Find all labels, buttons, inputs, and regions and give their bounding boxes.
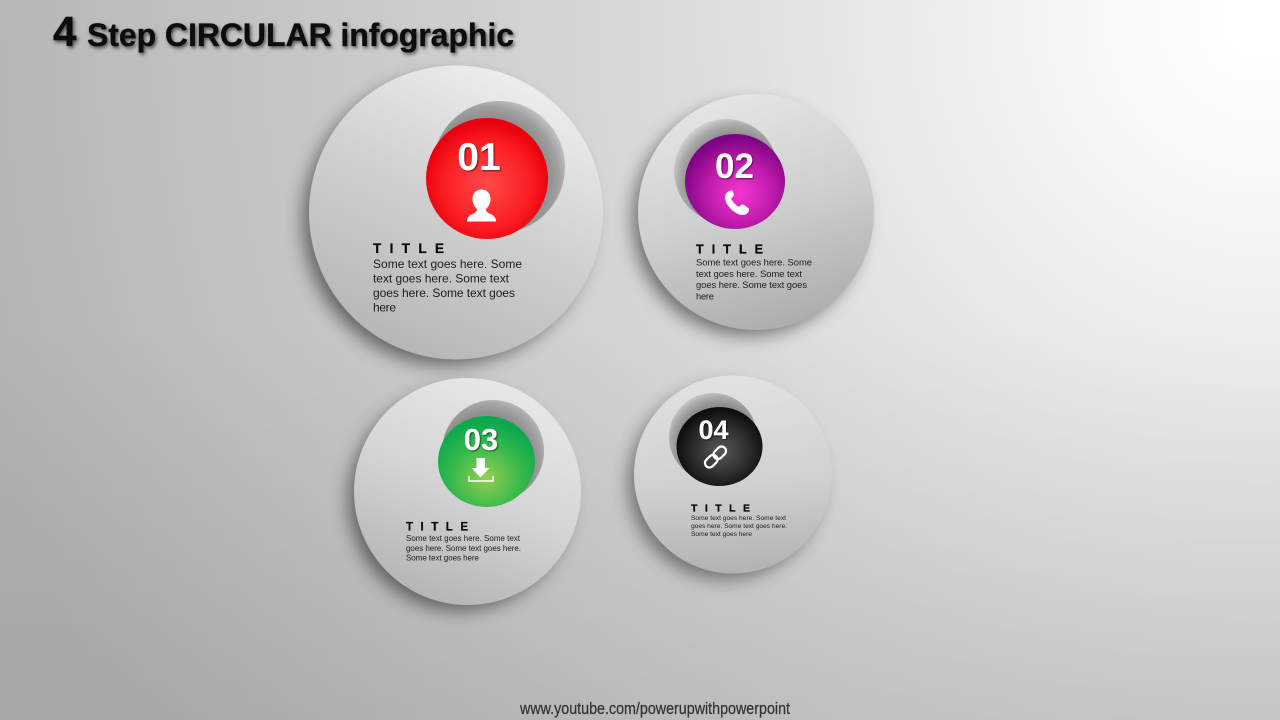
step 01 text: Some text goes here. Some bbox=[373, 257, 522, 271]
step 04 text bbox=[691, 515, 787, 538]
step 03 heading: TITLE bbox=[406, 522, 468, 534]
step 03 text: goes here. Some text goes here. bbox=[406, 544, 521, 553]
step 01 text bbox=[373, 257, 522, 314]
panel: step 03 bbox=[349, 378, 581, 610]
step 01 heading: TITLE bbox=[373, 241, 444, 256]
step 04 badge bbox=[676, 407, 762, 486]
step 02 badge bbox=[685, 134, 785, 229]
title: 4 bbox=[53, 8, 77, 55]
step 01 text: goes here. Some text goes bbox=[373, 286, 515, 300]
step 02 text: Some text goes here. Some bbox=[696, 257, 812, 268]
step 04 text: Some text goes here. Some text bbox=[691, 515, 786, 522]
step 01 text: here bbox=[373, 300, 396, 314]
panel: step 01 bbox=[303, 66, 603, 365]
step 04 text: goes here. Some text goes here. bbox=[691, 523, 787, 530]
step 02 heading: TITLE bbox=[696, 242, 763, 256]
step 02 number: 02 bbox=[715, 147, 754, 186]
footer url: www.youtube.com/powerupwithpowerpoint bbox=[519, 699, 790, 718]
step 03 text: Some text goes here bbox=[406, 554, 480, 563]
step 01 text: text goes here. Some text bbox=[373, 272, 510, 286]
panel: step 04 bbox=[629, 376, 832, 579]
step 02 text: here bbox=[696, 290, 714, 301]
step 04 text: Some text goes here bbox=[691, 531, 752, 538]
step 01 number: 01 bbox=[457, 136, 501, 179]
step 02 text: text goes here. Some text bbox=[696, 268, 802, 279]
step 02 text bbox=[696, 257, 812, 301]
step 01 badge bbox=[426, 118, 548, 239]
step 03 badge bbox=[438, 416, 535, 507]
panel: step 02 bbox=[633, 94, 874, 335]
step 02 text: goes here. Some text goes bbox=[696, 279, 807, 290]
step 04 heading: TITLE bbox=[691, 503, 750, 515]
icon: download bbox=[469, 458, 493, 481]
step 03 number: 03 bbox=[464, 422, 498, 457]
step 03 text: Some text goes here. Some text bbox=[406, 534, 521, 543]
title: Step CIRCULAR infographic bbox=[87, 17, 514, 53]
step 03 text bbox=[406, 534, 521, 563]
step 04 number: 04 bbox=[698, 415, 729, 445]
icon: person bbox=[467, 190, 496, 222]
icon: phone bbox=[725, 190, 749, 215]
icon: link bbox=[703, 445, 728, 469]
